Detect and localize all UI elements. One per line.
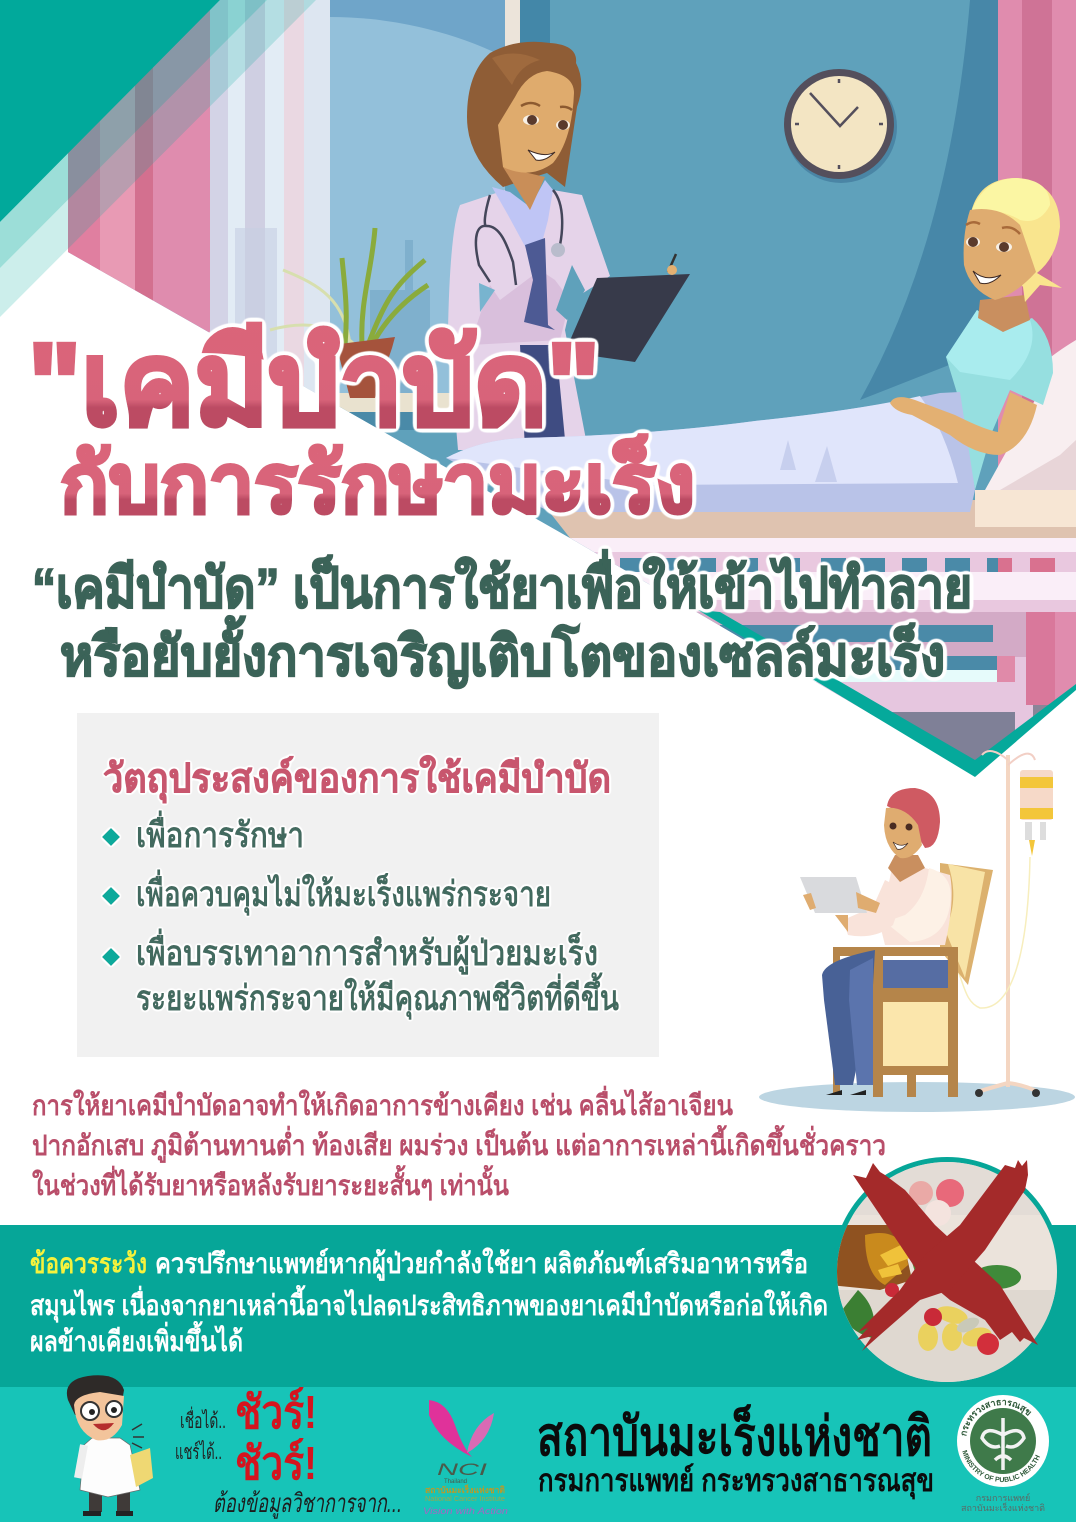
right curtain	[860, 0, 1076, 466]
objective 2	[102, 869, 551, 916]
sure campaign logo	[175, 1386, 402, 1519]
ministry seal: กระทรวงสาธารณสุข	[962, 1400, 1032, 1436]
teal V border	[698, 610, 1076, 777]
torso, arms, tablet	[800, 855, 952, 945]
legs	[822, 950, 875, 1095]
wall clock	[784, 69, 897, 183]
head and scarf	[884, 788, 940, 858]
IV pole	[945, 751, 1053, 1097]
side effects paragraph	[32, 1085, 886, 1201]
left curtain	[68, 0, 330, 420]
institute name: สถาบันมะเร็งแห่งชาติ	[537, 1405, 932, 1467]
sure campaign logo: เชื่อได้..	[180, 1406, 226, 1433]
footer band	[0, 1387, 1076, 1522]
sure campaign logo: ชัวร์!	[235, 1386, 317, 1438]
ministry seal: MINISTRY OF PUBLIC HEALTH	[962, 1450, 1040, 1482]
objective 2: เพื่อควบคุมไม่ให้มะเร็งแพร่กระจาย	[136, 869, 551, 916]
ministry seal	[957, 1395, 1049, 1513]
NCI butterfly logo: NCI	[437, 1460, 487, 1479]
title: กับการรักษามะเร็ง	[60, 434, 695, 530]
panel: caution band	[0, 1225, 1076, 1387]
sure campaign logo: ต้องข้อมูลวิชาการจาก...	[213, 1488, 402, 1519]
window	[68, 17, 649, 584]
bed base	[540, 500, 1076, 782]
ministry seal: กรมการแพทย์	[976, 1492, 1030, 1503]
plant	[270, 228, 428, 398]
teal corner bands	[0, 0, 316, 317]
NCI butterfly logo	[423, 1400, 508, 1516]
side effects paragraph: ในช่วงที่ได้รับยาหรือหลังรับยาระยะสั้นๆ เท่านั้น	[32, 1164, 509, 1201]
NCI butterfly logo: National Cancer Institute	[425, 1496, 505, 1503]
definition text	[32, 549, 972, 689]
institute name: กรมการแพทย์ กระทรวงสาธารณสุข	[538, 1463, 934, 1500]
NCI butterfly logo: Vision with Action	[423, 1506, 508, 1516]
panel: objectives	[77, 713, 659, 1057]
icon: cartoon doctor mascot	[67, 1375, 153, 1516]
ministry seal: สถาบันมะเร็งแห่งชาติ	[961, 1501, 1045, 1513]
side effects paragraph: ปากอักเสบ ภูมิต้านทานต่ำ ท้องเสีย ผมร่วง เป็นต้น แต่อาการเหล่านี้เกิดขึ้นชั่วคราว	[32, 1124, 886, 1163]
objective 1: เพื่อการรักษา	[136, 810, 304, 855]
caution text: ผลข้างเคียงเพิ่มขึ้นได้	[30, 1320, 243, 1357]
title: "เคมีบำบัด"	[28, 319, 600, 449]
objective 3	[102, 928, 619, 1020]
patient in bed	[446, 178, 1076, 527]
side effects paragraph: การให้ยาเคมีบำบัดอาจทำให้เกิดอาการข้างเคียง เช่น คลื่นไส้อาเจียน	[32, 1085, 733, 1121]
objective 1	[102, 810, 304, 855]
objective 3: ระยะแพร่กระจายให้มีคุณภาพชีวิตที่ดีขึ้น	[136, 972, 619, 1020]
doctor	[448, 42, 690, 450]
icon: supplements crossed out	[837, 1157, 1057, 1382]
armchair	[833, 863, 993, 1097]
objective 3: เพื่อบรรเทาอาการสำหรับผู้ป่วยมะเร็ง	[136, 928, 598, 975]
caution text	[30, 1247, 828, 1357]
caution text: ข้อควรระวัง	[30, 1248, 147, 1279]
institute name	[537, 1405, 934, 1500]
back wall	[339, 0, 998, 716]
caution text: สมุนไพร เนื่องจากยาเหล่านี้อาจไปลดประสิทธิภาพของยาเคมีบำบัดหรือก่อให้เกิด	[30, 1284, 828, 1323]
title	[28, 319, 695, 530]
chemo patient on chair	[759, 751, 1075, 1112]
definition text: หรือยับยั้งการเจริญเติบโตของเซลล์มะเร็ง	[60, 616, 945, 689]
definition text: “เคมีบำบัด” เป็นการใช้ยาเพื่อให้เข้าไปทำลาย	[32, 549, 972, 619]
hospital room illustration	[68, 0, 1076, 760]
NCI butterfly logo: Thailand	[444, 1479, 467, 1485]
caution text: ควรปรึกษาแพทย์หากผู้ป่วยกำลังใช้ยา ผลิตภัณฑ์เสริมอาหารหรือ	[155, 1247, 808, 1281]
NCI butterfly logo: สถาบันมะเร็งแห่งชาติ	[425, 1483, 505, 1495]
objectives heading: วัตถุประสงค์ของการใช้เคมีบำบัด	[103, 755, 611, 804]
red cross mark	[853, 1160, 1038, 1351]
sure campaign logo: ชัวร์!	[235, 1437, 317, 1489]
sure campaign logo: แชร์ได้..	[175, 1440, 222, 1464]
